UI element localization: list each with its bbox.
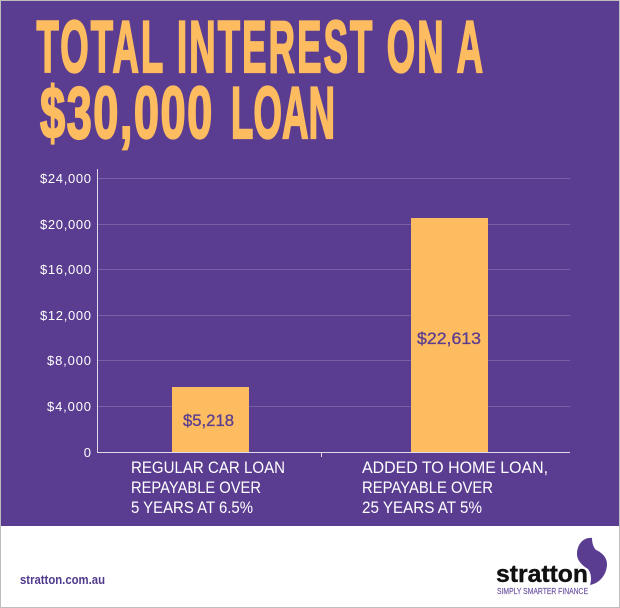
y axis labels: $12,000	[40, 308, 91, 323]
website url: stratton.com.au	[20, 573, 105, 587]
label: added to home loan	[362, 459, 548, 517]
value: home loan: $22,613	[417, 330, 481, 348]
label: added to home loan: 25 YEARS AT 5%	[362, 499, 482, 517]
logo wordmark: stratton	[496, 561, 588, 588]
y axis labels	[40, 171, 91, 460]
bar chart	[40, 169, 570, 460]
value: car loan: $5,218	[183, 412, 234, 430]
label: added to home loan: ADDED TO HOME LOAN,	[362, 459, 548, 477]
title: LOAN	[231, 73, 335, 154]
bar: regular car loan	[172, 387, 249, 452]
y axis labels: $20,000	[40, 217, 91, 232]
y axis labels: $16,000	[40, 262, 91, 277]
label: added to home loan: REPAYABLE OVER	[362, 479, 493, 497]
title	[36, 7, 483, 154]
y axis labels: $8,000	[47, 353, 91, 368]
label: regular car loan: 5 YEARS AT 6.5%	[131, 499, 253, 517]
title: $30,000	[40, 72, 212, 154]
y axis labels: $24,000	[40, 171, 91, 186]
axes	[97, 169, 570, 457]
label: regular car loan: REPAYABLE OVER	[131, 479, 261, 497]
icon: logo s mark	[577, 538, 607, 585]
y axis labels: $4,000	[47, 399, 91, 414]
y axis labels: 0	[84, 445, 91, 460]
label: regular car loan: REGULAR CAR LOAN	[131, 459, 285, 477]
label: regular car loan	[131, 459, 285, 517]
stratton logo	[496, 538, 607, 596]
bar: added to home loan	[411, 218, 488, 452]
title: TOTAL INTEREST ON A	[36, 7, 483, 88]
logo tagline: SIMPLY SMARTER FINANCE	[497, 586, 588, 596]
